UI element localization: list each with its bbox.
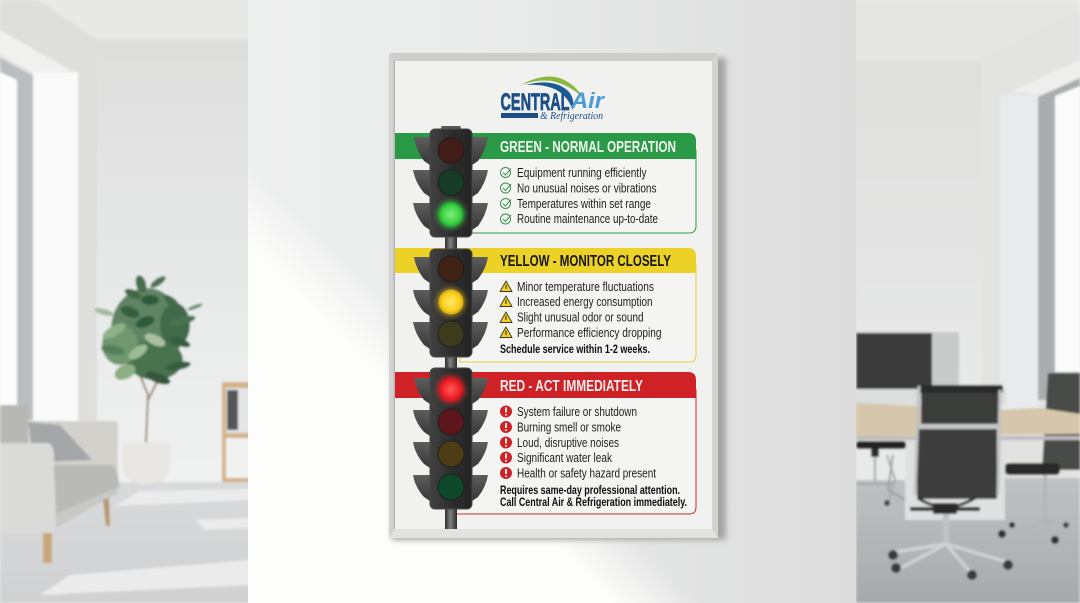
poster shadow: [392, 58, 726, 540]
dark red lens: [438, 409, 464, 435]
red panel body: [455, 390, 696, 514]
right ceiling: [850, 0, 1080, 60]
left floor: [0, 482, 250, 603]
traffic light: yellow active: [413, 249, 488, 357]
logo word Central: CENTRAL: [500, 89, 570, 116]
right side wall: [981, 10, 1080, 420]
housing: [430, 368, 472, 509]
red action note: Requires same-day professional attention.: [500, 485, 680, 497]
poster paper: [395, 61, 712, 529]
alert icons: [500, 406, 512, 479]
yellow items text: Slight unusual odor or sound: [517, 310, 644, 324]
logo subline: & Refrigeration: [540, 110, 603, 122]
visors: [413, 378, 488, 501]
green lens glow: [436, 200, 466, 229]
dark green lens: [438, 474, 464, 500]
green heading: GREEN - NORMAL OPERATION: [500, 139, 676, 156]
table top: [856, 403, 1080, 436]
yellow panel body: [460, 265, 696, 362]
panel: red act immediately: [395, 372, 696, 514]
window reveal: [1000, 95, 1038, 415]
white table base: [905, 440, 1005, 520]
green banner: [395, 133, 696, 159]
logo: Central Air and Refrigeration: [500, 77, 606, 122]
housing: [430, 129, 472, 237]
foreground office chair: [888, 385, 1013, 580]
yellow items text: [517, 280, 662, 340]
screen panel: [856, 332, 959, 390]
yellow items text: Performance efficiency dropping: [517, 326, 662, 340]
plant foliage: [94, 274, 203, 387]
right back wall: [856, 62, 981, 412]
traffic light pole: [445, 235, 457, 529]
yellow items text: Minor temperature fluctuations: [517, 280, 654, 294]
poster frame: [389, 53, 718, 538]
window soffit: [0, 30, 72, 73]
center wall: [248, 0, 856, 603]
wall under table: [856, 440, 906, 480]
window soffit: [1010, 60, 1080, 95]
yellow lens glow: [436, 288, 466, 316]
window frame: [0, 58, 33, 420]
red items text: [517, 405, 656, 480]
poster: [389, 53, 726, 540]
visors: [413, 257, 488, 349]
red items text: Burning smell or smoke: [517, 420, 621, 434]
left back wall: [97, 40, 250, 485]
dark monitor: [856, 333, 932, 389]
red banner: [395, 372, 696, 398]
yellow items text: Increased energy consumption: [517, 295, 653, 309]
window reveal: [33, 72, 78, 422]
window glass: [1055, 86, 1080, 372]
green items text: No unusual noises or vibrations: [517, 182, 656, 196]
red action note: [500, 485, 687, 509]
logo swoosh blue: [526, 82, 573, 110]
wall sunlight: [248, 0, 856, 603]
red items text: Health or safety hazard present: [517, 466, 656, 480]
yellow list: [500, 280, 662, 356]
sofa: [0, 405, 119, 563]
red lens off: [438, 256, 464, 282]
right room background: [850, 0, 1080, 603]
background chair seat: [998, 463, 1072, 544]
red items text: Significant water leak: [517, 451, 613, 465]
dark yellow lens: [438, 441, 464, 467]
green items text: Temperatures within set range: [517, 197, 651, 211]
green panel body: [470, 150, 696, 233]
red lens on: [438, 377, 464, 402]
green position lens off: [438, 170, 464, 196]
background chair back: [1042, 373, 1080, 470]
floor light streaks: [40, 489, 250, 595]
red lens glow: [436, 375, 466, 404]
cap: [441, 126, 461, 131]
logo word Air: Air: [570, 88, 606, 113]
red list: [500, 405, 687, 509]
left room background: [0, 0, 250, 603]
alert icon marks: [505, 408, 507, 477]
plant trunk: [140, 375, 158, 442]
green lens on: [438, 202, 464, 227]
green check icons: [500, 168, 511, 224]
red lens off: [438, 138, 464, 164]
desk modesty panel: [856, 389, 1006, 405]
green items text: [517, 166, 658, 226]
visors: [413, 137, 488, 230]
yellow heading: YELLOW - MONITOR CLOSELY: [500, 253, 671, 270]
logo swoosh: [521, 77, 583, 98]
traffic light: red active, four lens: [413, 368, 488, 509]
right floor: [856, 478, 1080, 603]
plant pot: [122, 442, 170, 484]
red action note: Call Central Air & Refrigeration immediately.: [500, 497, 687, 509]
logo bar: [501, 113, 538, 118]
panel: yellow monitor closely: [395, 248, 696, 362]
green list: [500, 166, 658, 226]
left side wall: [0, 0, 97, 420]
panel: green normal operation: [395, 133, 696, 233]
green lens off: [438, 321, 464, 347]
bookshelf: [222, 382, 250, 482]
warning icon marks: [505, 284, 507, 335]
red items text: System failure or shutdown: [517, 405, 637, 419]
yellow banner: [395, 248, 696, 273]
yellow lens on: [438, 290, 464, 314]
warning icons: [500, 281, 512, 338]
green items text: Equipment running efficiently: [517, 166, 647, 180]
green items text: Routine maintenance up-to-date: [517, 212, 658, 226]
window glass: [0, 72, 17, 405]
left ceiling: [38, 0, 250, 42]
red items text: Loud, disruptive noises: [517, 436, 619, 450]
window frame: [1038, 78, 1080, 400]
traffic light: green active: [413, 126, 488, 237]
yellow action note: Schedule service within 1-2 weeks.: [500, 344, 650, 356]
background chair left: [856, 441, 906, 506]
red heading: RED - ACT IMMEDIATELY: [500, 378, 644, 395]
housing: [430, 249, 472, 357]
